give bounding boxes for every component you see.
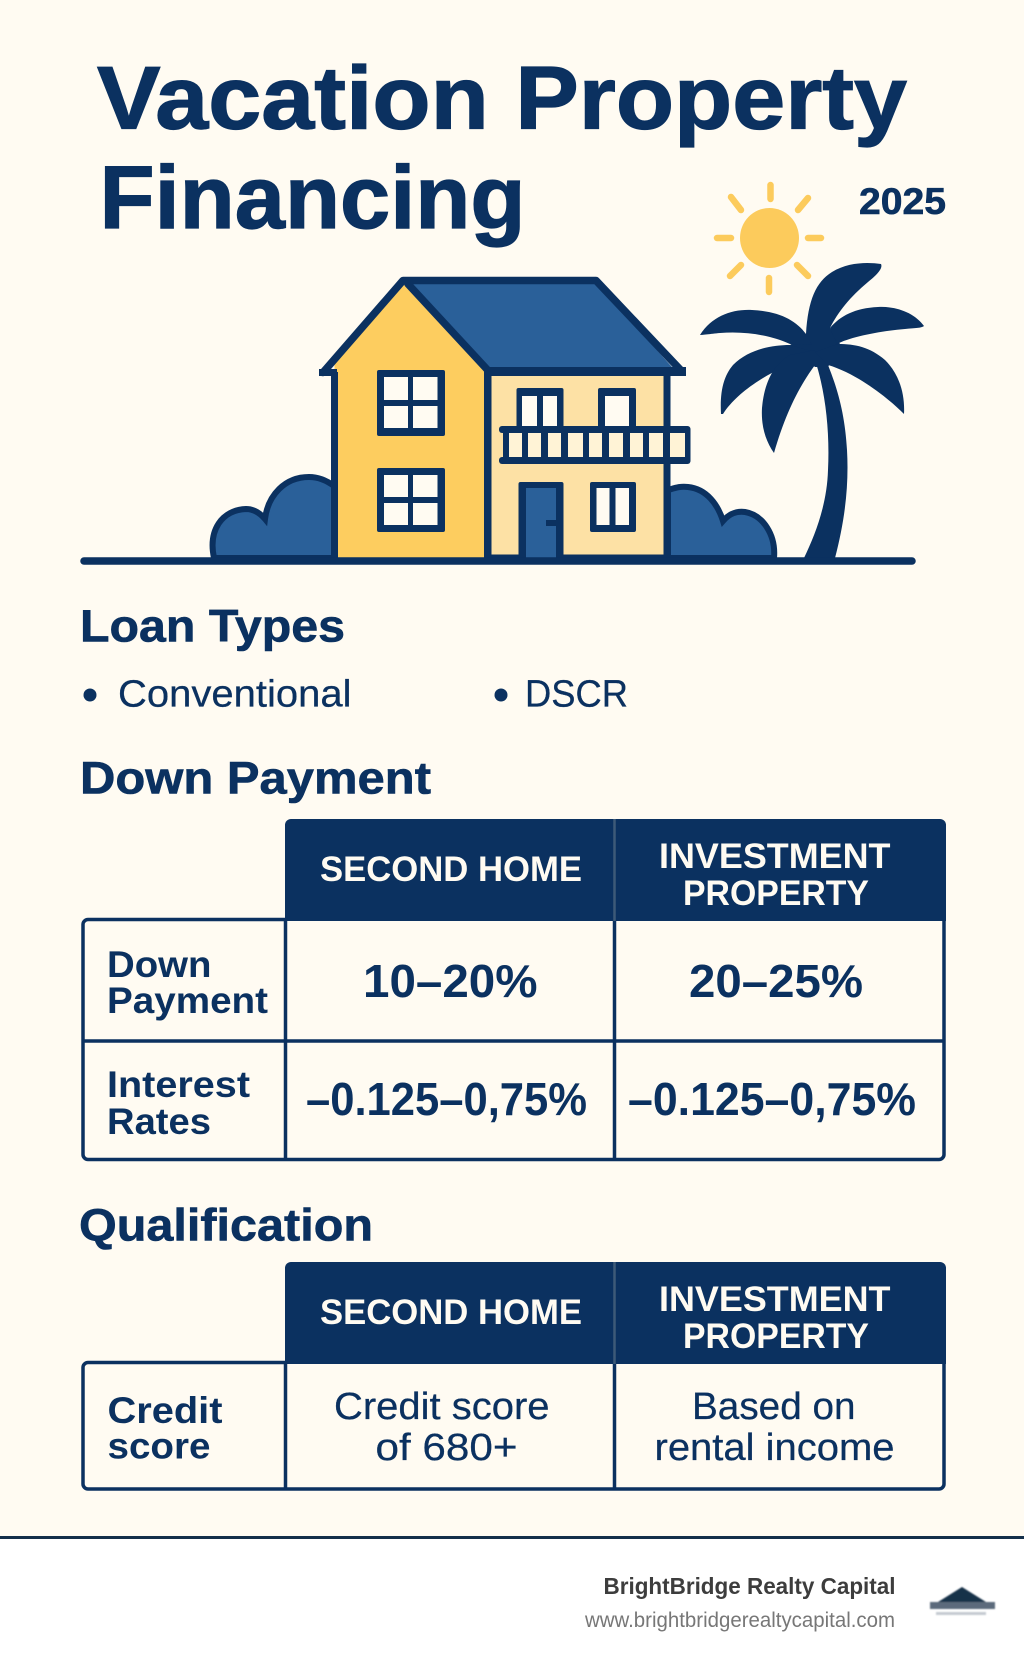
- company website: www.brightbridgerealtycapital.com: [584, 1609, 895, 1632]
- heading: qualification: Qualification: [79, 1200, 373, 1250]
- wall strokes: [334, 368, 488, 558]
- row label: down payment: Down: [107, 944, 212, 985]
- value: second home credit score: [334, 1386, 550, 1469]
- eaves: [319, 367, 686, 376]
- table header: [285, 1262, 946, 1364]
- loan types list: Conventional: [118, 674, 352, 716]
- company name: BrightBridge Realty Capital: [604, 1573, 896, 1599]
- row label: credit score: [108, 1390, 222, 1466]
- row label: interest rates: Rates: [107, 1101, 211, 1142]
- icon: right bush: [668, 487, 774, 558]
- value: investment credit basis: [654, 1386, 894, 1469]
- year label: 2025: [859, 181, 946, 222]
- balcony door right: [598, 388, 636, 428]
- heading: loan types: Loan Types: [80, 600, 345, 652]
- table header: INVESTMENT: [659, 837, 890, 876]
- table header: PROPERTY: [683, 874, 869, 913]
- row label: down payment: Payment: [107, 980, 268, 1021]
- table header: [285, 819, 946, 921]
- value: investment down payment: 20–25%: [689, 955, 863, 1007]
- ground line: [84, 557, 912, 565]
- icon: house: [319, 280, 690, 558]
- left wall: [334, 281, 488, 558]
- title: Financing: [100, 147, 526, 247]
- row label: credit score: score: [108, 1426, 210, 1466]
- icon: left bush: [213, 477, 334, 558]
- table header: SECOND HOME: [320, 850, 582, 889]
- table header: INVESTMENT: [659, 1280, 890, 1319]
- roof: [408, 281, 672, 367]
- table header: PROPERTY: [683, 1317, 869, 1356]
- row label: down payment: [107, 944, 268, 1021]
- value: second home interest: –0.125–0,75%: [306, 1073, 587, 1125]
- table: down payment: [83, 819, 946, 1160]
- value: investment credit basis: rental income: [654, 1427, 894, 1469]
- table grid: [83, 1362, 944, 1489]
- heading: down payment: Down Payment: [80, 752, 431, 804]
- right wall: [488, 372, 667, 558]
- loan types list: [84, 674, 628, 716]
- icon: palm tree: [700, 263, 924, 558]
- balcony railing: [499, 426, 690, 464]
- row label: interest rates: Interest: [107, 1064, 250, 1105]
- value: second home credit score: of 680+: [376, 1427, 518, 1469]
- title: [97, 48, 908, 247]
- lower right window: [590, 482, 636, 532]
- icon: sun: [717, 185, 821, 292]
- row label: credit score: Credit: [108, 1390, 222, 1431]
- upper left window: [377, 370, 445, 436]
- balcony door left: [516, 388, 564, 428]
- loan types list: DSCR: [525, 674, 628, 716]
- front door: [518, 482, 564, 558]
- table: qualification: [83, 1262, 946, 1489]
- value: investment credit basis: Based on: [692, 1386, 856, 1428]
- footer: [0, 1536, 1024, 1666]
- lower left window: [377, 468, 445, 532]
- table grid: [83, 920, 944, 1160]
- row label: interest rates: [107, 1064, 250, 1142]
- value: investment interest: –0.125–0,75%: [628, 1073, 916, 1125]
- value: second home down payment: 10–20%: [363, 955, 538, 1007]
- roof outline: [323, 280, 682, 372]
- title: Vacation Property: [97, 48, 908, 148]
- table header: SECOND HOME: [320, 1293, 582, 1332]
- value: second home credit score: Credit score: [334, 1386, 550, 1428]
- company logo: [930, 1587, 995, 1615]
